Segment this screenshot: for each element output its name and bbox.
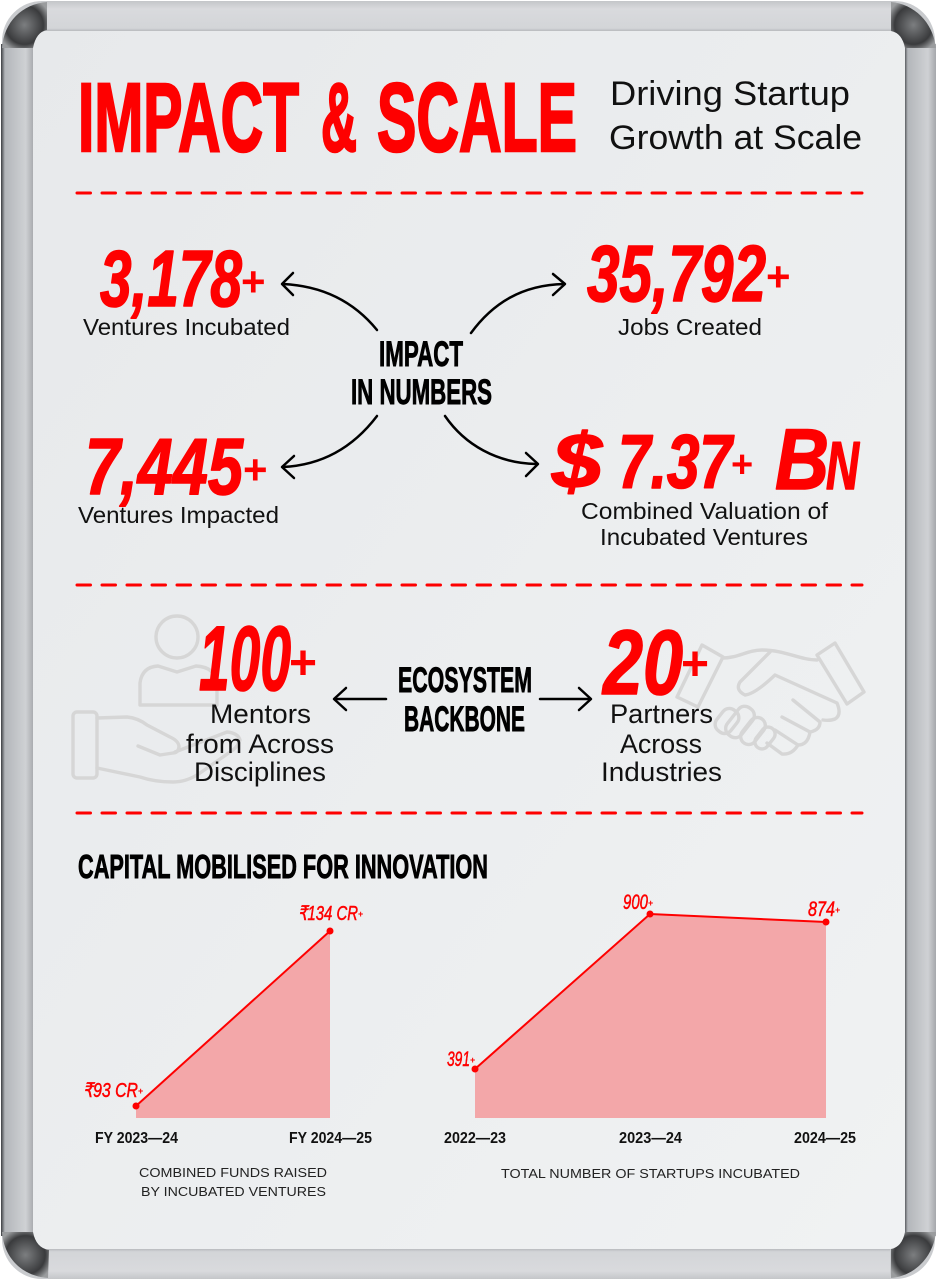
stat: mentors: Disciplines: [194, 757, 326, 787]
title: &: [321, 63, 357, 172]
stat: combined valuation: N: [826, 428, 860, 504]
chart: funds raised: ₹134 CR: [298, 903, 358, 925]
chart: startups incubated: 391: [447, 1048, 470, 1071]
stat: mentors: Mentors: [210, 699, 311, 729]
chart: funds raised: +: [358, 909, 363, 919]
stat: jobs created: Jobs Created: [618, 314, 762, 340]
icon: mentor hand with person: [73, 616, 240, 782]
chart: funds raised: ₹93 CR: [83, 1080, 138, 1102]
chart: startups incubated: 900: [623, 891, 648, 914]
arrow: to combined valuation: [445, 416, 538, 476]
ecosystem backbone heading: [398, 661, 532, 739]
chart: funds raised: [83, 903, 372, 1199]
stat: mentors: [186, 608, 334, 787]
stat: ventures incubated: +: [241, 258, 266, 305]
stat: mentors: from Across: [186, 729, 334, 759]
subtitle: [609, 75, 862, 157]
stat: combined valuation: Incubated Ventures: [600, 524, 808, 550]
stat: mentors: +: [289, 637, 317, 690]
subtitle: Driving Startup: [610, 75, 850, 113]
arrow: to ventures incubated: [282, 273, 377, 330]
ecosystem backbone heading: ECOSYSTEM: [398, 661, 532, 700]
stat: partners: 20: [601, 612, 683, 714]
stat: jobs created: 35,792: [587, 229, 766, 318]
title: SCALE: [377, 63, 577, 172]
icon: handshake: [677, 643, 864, 754]
stat: partners: [601, 612, 722, 787]
chart: startups incubated: 2022—23: [444, 1130, 506, 1147]
chart: startups incubated: +: [835, 905, 840, 915]
stat: ventures impacted: 7,445: [85, 422, 244, 511]
stat: ventures incubated: Ventures Incubated: [83, 314, 290, 340]
stat: combined valuation: $: [551, 417, 604, 505]
stat: ventures impacted: +: [243, 446, 268, 493]
ecosystem backbone heading: BACKBONE: [404, 700, 525, 739]
chart: startups incubated: 874: [808, 898, 835, 921]
arrow: to mentors: [334, 688, 386, 710]
chart: funds raised: BY INCUBATED VENTURES: [141, 1184, 326, 1199]
chart: startups incubated: 2024—25: [794, 1130, 856, 1147]
arrow: to ventures impacted: [282, 416, 377, 478]
stat: partners: +: [681, 638, 709, 691]
stat: combined valuation: [551, 412, 860, 550]
impact in numbers heading: IMPACT: [379, 335, 463, 374]
stat: partners: Industries: [601, 757, 722, 787]
stat: combined valuation: 7.37: [618, 420, 735, 505]
stat: mentors: 100: [199, 608, 291, 710]
stat: jobs created: +: [766, 253, 791, 300]
stat: ventures incubated: 3,178: [100, 234, 242, 323]
chart: startups incubated: [444, 891, 856, 1181]
stat: partners: Across: [620, 729, 702, 759]
impact in numbers heading: [351, 335, 492, 412]
stat: partners: Partners: [610, 699, 713, 729]
stat: combined valuation: Combined Valuation of: [581, 498, 829, 524]
chart: funds raised: FY 2024—25: [289, 1130, 372, 1147]
impact in numbers heading: IN NUMBERS: [351, 373, 492, 412]
stat: combined valuation: +: [731, 444, 753, 486]
arrow: to jobs created: [471, 274, 565, 333]
stat: jobs created: [587, 229, 791, 340]
stat: combined valuation: B: [775, 412, 829, 508]
chart: funds raised: COMBINED FUNDS RAISED: [139, 1165, 327, 1180]
subtitle: Growth at Scale: [609, 119, 862, 157]
chart: funds raised: +: [138, 1086, 143, 1096]
title: IMPACT: [78, 63, 299, 172]
chart: startups incubated: +: [648, 898, 653, 908]
stat: ventures impacted: Ventures Impacted: [78, 502, 279, 528]
chart: funds raised: FY 2023—24: [95, 1130, 178, 1147]
arrow: to partners: [540, 688, 591, 710]
chart: startups incubated: +: [470, 1055, 475, 1065]
chart: startups incubated: TOTAL NUMBER OF STARTUPS INCUBATED: [501, 1166, 800, 1181]
capital section heading: CAPITAL MOBILISED FOR INNOVATION: [78, 848, 488, 885]
chart: startups incubated: 2023—24: [619, 1130, 682, 1147]
